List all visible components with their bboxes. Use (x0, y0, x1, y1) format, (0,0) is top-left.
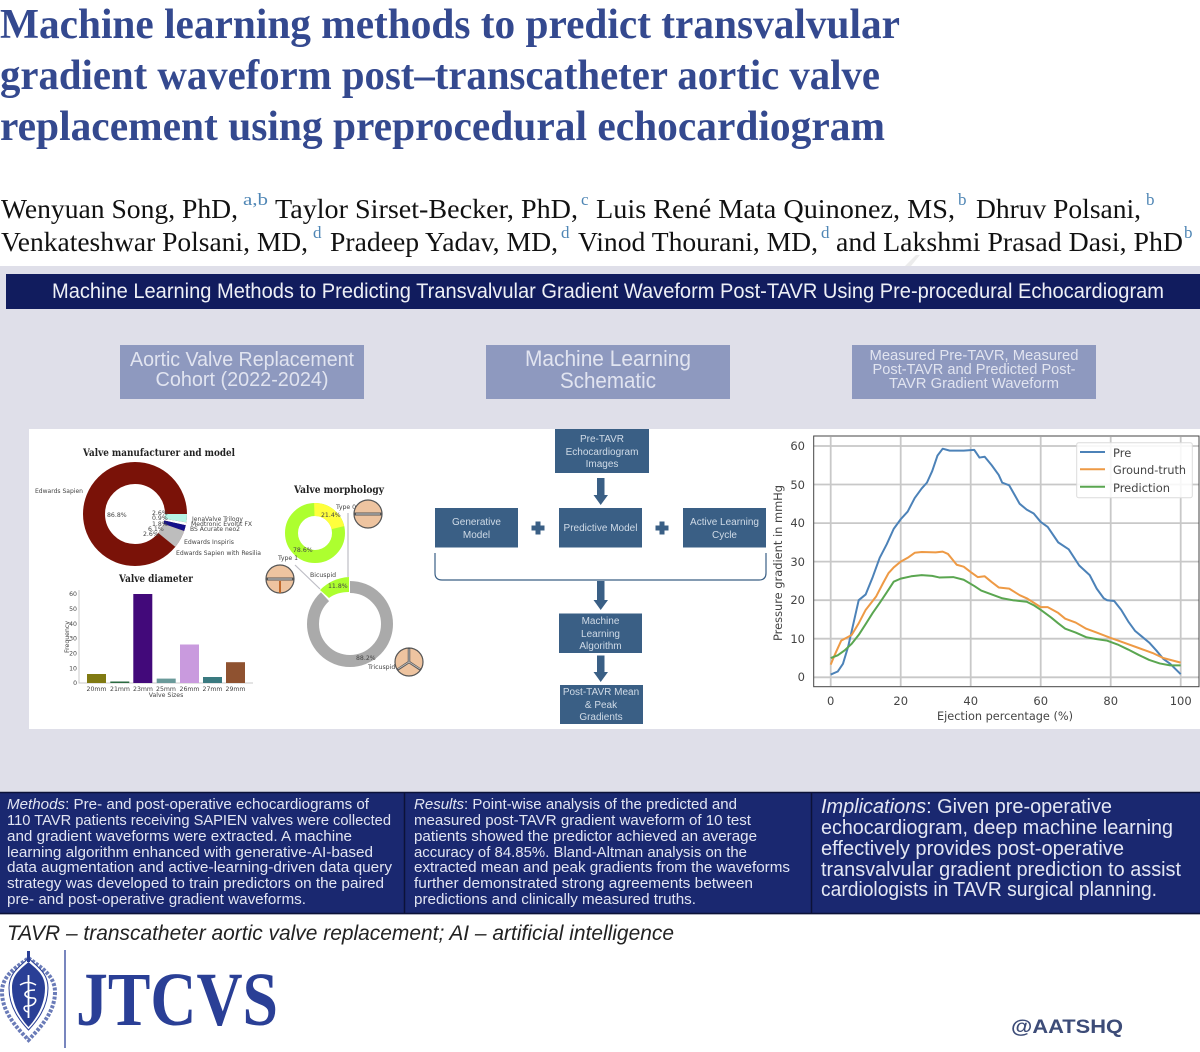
authors: d (561, 223, 570, 242)
panel: machine learning flow diagram (435, 429, 766, 724)
labels: valve morphology: Type 1 (277, 555, 298, 562)
subheading: schematic (486, 345, 730, 399)
x axis labels (827, 694, 1192, 708)
panel: implications (812, 792, 1200, 914)
legend: Pre (1113, 446, 1131, 460)
icon: shield emblem (2, 951, 55, 1040)
labels: valve manufacturer: BS Acurate neo2 (190, 526, 240, 533)
labels: valve manufacturer: 86.8% (107, 512, 127, 519)
subheading: waveform: Post-TAVR and Predicted Post- (872, 361, 1076, 378)
authors: and Lakshmi Prasad Dasi, PhD (836, 226, 1183, 257)
arrow: to algorithm (594, 581, 608, 610)
bar chart: valve diameter: 27mm (203, 686, 222, 693)
panel: results: further demonstrated strong agreements between (414, 876, 753, 892)
authors (1, 190, 1192, 257)
panel: methods: Methods: Pre- and post-operative echocardiograms of (7, 797, 370, 813)
authors: b (1184, 223, 1192, 242)
box: post-TAVR gradients: & Peak (585, 700, 618, 711)
y axis title: Pressure gradient in mmHg (771, 485, 785, 641)
labels: valve morphology: 88.2% (356, 655, 376, 662)
box: pre-TAVR images: Images (586, 459, 618, 470)
bar chart: valve diameter: 26mm (180, 686, 199, 693)
subheading: cohort: Aortic Valve Replacement (130, 349, 354, 371)
panel: methods: strategy was developed to train predictors on the paired (7, 876, 384, 892)
panel: methods: pre- and post-operative gradient waveforms. (7, 892, 306, 908)
box: post-TAVR gradients: Gradients (579, 712, 623, 723)
icon: plus (532, 522, 544, 534)
legend: Prediction (1113, 481, 1170, 495)
x axis labels: 80 (1103, 694, 1118, 708)
arrow: to gradients (594, 656, 608, 682)
header bar (6, 274, 1200, 309)
wordmark: JTCVS (76, 958, 278, 1042)
x axis labels: 40 (963, 694, 978, 708)
waveform curves (831, 449, 1181, 675)
labels: valve manufacturer: 6.1% (148, 526, 164, 533)
y axis labels: 0 (798, 670, 805, 684)
subheading: waveform: TAVR Gradient Waveform (889, 375, 1059, 392)
box: machine learning algorithm (559, 614, 642, 653)
labels: valve morphology: 78.6% (293, 547, 313, 554)
donut: bicuspid vs tricuspid (295, 513, 387, 661)
panel: implications: echocardiogram, deep machine learning (821, 817, 1173, 839)
labels: valve morphology: Tricuspid (367, 664, 395, 671)
authors: a,b (243, 190, 268, 209)
bar chart: valve diameter: 40 (69, 621, 77, 628)
panel: implications: cardiologists in TAVR surgical planning. (821, 879, 1157, 901)
bar chart: valve diameter: 21mm (110, 686, 130, 693)
y axis labels: 30 (790, 555, 805, 569)
box: predictive model (559, 508, 642, 548)
title (0, 2, 900, 150)
bar chart: valve diameter: 60 (69, 591, 77, 598)
donut: valve manufacturer and model (94, 473, 176, 555)
authors: Venkateshwar Polsani, MD, (1, 226, 308, 257)
authors: Luis René Mata Quinonez, MS, (596, 193, 955, 224)
labels: valve manufacturer (35, 488, 261, 557)
box: predictive model: Predictive Model (564, 523, 637, 534)
labels: valve morphology: Type 0 (335, 504, 356, 511)
donut: valve morphology type (292, 510, 338, 556)
title: gradient waveform post–transcatheter aortic valve (0, 53, 880, 99)
box: pre-TAVR images: Pre-TAVR (580, 434, 624, 445)
labels: valve morphology: 21.4% (321, 512, 341, 519)
box: post-TAVR gradients (560, 685, 643, 724)
box: active learning cycle (683, 508, 766, 548)
panel: results: patients showed the predictor achieved an average (414, 829, 757, 845)
title: Machine learning methods to predict transvalvular (0, 2, 900, 48)
y axis labels (790, 439, 805, 684)
bar chart: valve diameter: 20 (69, 650, 77, 658)
panel: methods (0, 792, 405, 914)
icon: plus (656, 522, 668, 534)
box: machine learning algorithm: Algorithm (579, 641, 622, 652)
bar chart: valve diameter: 0 (73, 680, 77, 687)
heading: valve diameter: Valve diameter (118, 573, 193, 585)
panel: results: accuracy of 84.85%. Bland-Altman analysis on the (414, 845, 747, 861)
title: replacement using preprocedural echocardiogram (0, 104, 885, 150)
plot frame (814, 436, 1199, 687)
panel: results: measured post-TAVR gradient waveform of 10 test (414, 813, 751, 829)
x axis labels: 0 (827, 694, 834, 708)
authors: c (581, 190, 589, 209)
panel: white figure area (29, 429, 1200, 729)
labels: valve morphology: Bicuspid (310, 572, 336, 579)
panel: implications: transvalvular gradient prediction to assist (821, 859, 1181, 881)
line chart: pressure gradient waveform (771, 436, 1199, 723)
labels: valve manufacturer: Edwards Inspiris (184, 539, 234, 546)
box: generative model: Generative (452, 517, 501, 528)
logo: JTCVS (2, 950, 278, 1048)
y axis labels: 50 (790, 478, 805, 492)
labels: valve morphology: 11.8% (328, 583, 348, 590)
y axis labels: 20 (790, 593, 805, 607)
authors: Taylor Sirset-Becker, PhD, (275, 193, 578, 224)
box: active learning cycle: Active Learning (690, 517, 759, 528)
subheading: schematic: Machine Learning (525, 346, 691, 371)
bar chart: valve diameter: 25mm (156, 686, 176, 693)
subheading: cohort: Cohort (2022-2024) (156, 369, 328, 391)
subheading: waveform: Measured Pre-TAVR, Measured (870, 347, 1078, 364)
box: pre-TAVR images (555, 429, 649, 473)
box: generative model (435, 508, 518, 548)
footnote: TAVR – transcatheter aortic valve replacement; AI – artificial intelligence (7, 922, 674, 945)
bracket (435, 553, 766, 580)
labels: valve manufacturer: 2.6% (152, 510, 168, 517)
authors: Pradeep Yadav, MD, (330, 226, 558, 257)
panel: cohort charts (35, 447, 423, 699)
box: machine learning algorithm: Machine (582, 616, 620, 627)
y axis labels: 10 (790, 632, 805, 646)
labels: valve manufacturer: Edwards Sapien (35, 488, 83, 495)
panel: implications: effectively provides post-operative (821, 838, 1124, 860)
panel: methods: learning algorithm enhanced with generative-AI-based (7, 845, 373, 861)
y axis labels: 60 (790, 439, 805, 453)
grid lines (814, 437, 1199, 686)
labels: valve manufacturer: 1.8% (152, 521, 168, 528)
subheading: schematic: Schematic (560, 368, 656, 393)
authors: d (313, 223, 322, 242)
bar chart: valve diameter: 20mm (87, 686, 106, 693)
bar chart: valve diameter: Valve Sizes (149, 692, 183, 699)
box: pre-TAVR images: Echocardiogram (566, 447, 638, 458)
panel: methods: data augmentation and active-learning-driven data query (7, 860, 393, 876)
authors: b (1146, 190, 1154, 209)
handle: @AATSHQ: @AATSHQ (1011, 1017, 1123, 1038)
panel: results (404, 792, 812, 914)
bar chart: valve diameter (64, 590, 253, 699)
authors: Vinod Thourani, MD, (578, 226, 818, 257)
subheading: waveform (852, 345, 1096, 399)
labels: valve manufacturer: JenaValve Trilogy (191, 516, 243, 523)
legend (1077, 443, 1192, 498)
bar chart: valve diameter: Frequency (64, 621, 71, 653)
panel: methods: and gradient waveforms were extracted. A machine (7, 829, 352, 845)
labels: valve manufacturer: Medtronic Evolut FX (191, 521, 253, 528)
authors: d (821, 223, 830, 242)
heading: valve morphology: Valve morphology (293, 484, 385, 496)
x axis title: Ejection percentage (%) (937, 709, 1073, 723)
labels: valve manufacturer: 2.6% (143, 531, 159, 538)
panel: graphical abstract background (0, 266, 1200, 915)
bar chart: valve diameter: 23mm (133, 686, 153, 693)
icon: tricuspid valve (395, 648, 423, 676)
panel: results: Results: Point-wise analysis of the predicted and (414, 797, 737, 813)
labels: valve morphology (277, 504, 395, 671)
panel: results: extracted mean and peak gradients from the waveforms (414, 860, 790, 876)
labels: valve manufacturer: Edwards Sapien with Resilia (176, 550, 261, 557)
bar chart: valve diameter: 10 (69, 666, 77, 672)
panel: results: predictions and clinically measured truths. (414, 892, 696, 908)
arrow: to predictive model (594, 478, 608, 505)
divider line (64, 950, 66, 1048)
bar chart: valve diameter: 50 (69, 606, 77, 613)
box: generative model: Model (463, 530, 490, 541)
panel: methods: 110 TAVR patients receiving SAPIEN valves were collected (7, 813, 391, 829)
authors: Dhruv Polsani, (976, 193, 1141, 224)
box: active learning cycle: Cycle (712, 530, 737, 541)
authors: b (958, 190, 966, 209)
heading: valve manufacturer: Valve manufacturer and model (82, 447, 235, 459)
y axis labels: 40 (790, 516, 805, 530)
subheading: cohort (120, 345, 364, 399)
bar chart: valve diameter: 29mm (226, 686, 245, 693)
icon: type 1 valve (266, 565, 294, 593)
authors: Wenyuan Song, PhD, (1, 193, 238, 224)
header bar: Machine Learning Methods to Predicting Transvalvular Gradient Waveform Post-TAVR Using Pre-procedural Echocardiogram (52, 280, 1164, 303)
panel: implications: Implications: Given pre-operative (821, 796, 1112, 818)
box: post-TAVR gradients: Post-TAVR Mean (563, 687, 639, 698)
box: machine learning algorithm: Learning (581, 629, 620, 640)
legend: Ground-truth (1113, 463, 1186, 477)
x axis labels: 60 (1033, 694, 1048, 708)
labels: valve manufacturer: 0.9% (152, 515, 168, 522)
x axis labels: 20 (893, 694, 908, 708)
bar chart: valve diameter: 30 (69, 636, 77, 642)
icon: type 0 valve (354, 500, 382, 528)
x axis labels: 100 (1170, 694, 1192, 708)
